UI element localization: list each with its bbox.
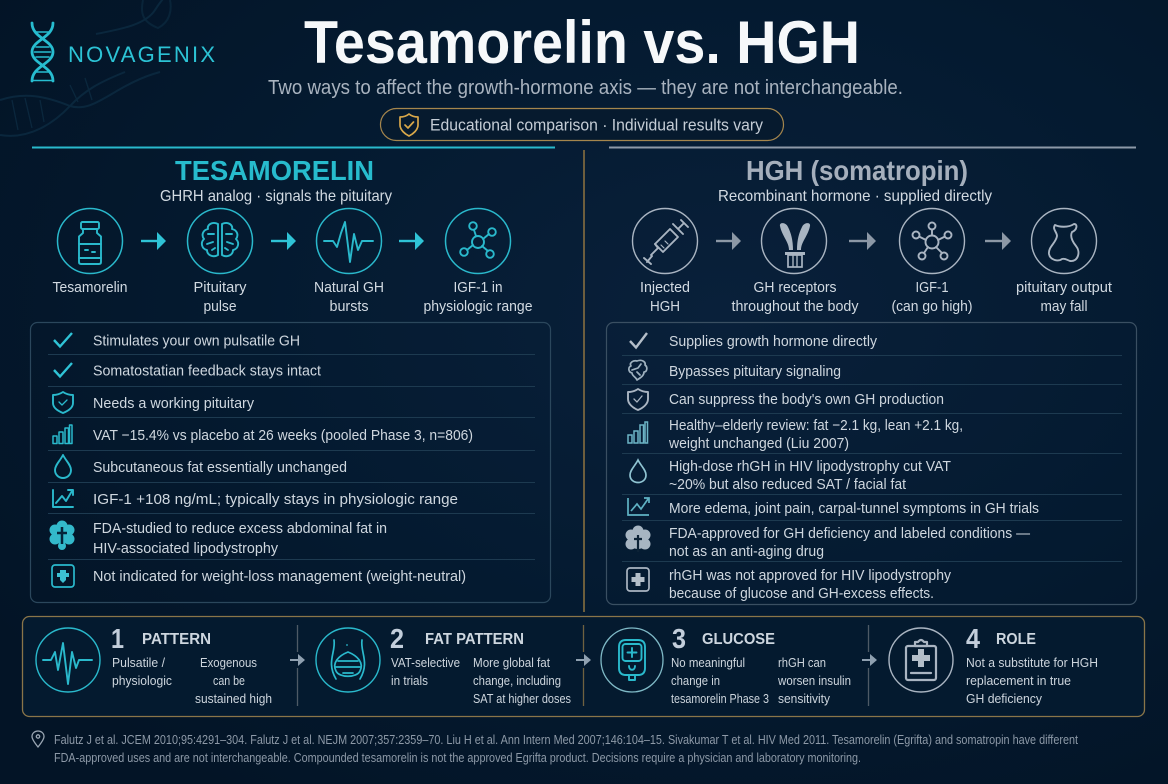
row: subcutaneous fat: Subcutaneous fat essentially unchanged <box>93 459 347 476</box>
step: IGF-1 physiologic range: IGF-1 in <box>454 279 502 296</box>
item 4: role: replacement in true <box>966 673 1071 688</box>
step: Natural GH bursts <box>314 208 384 315</box>
step: GH receptors: GH receptors <box>754 279 836 296</box>
item 4: role: ROLE <box>996 631 1036 648</box>
item 2: fat pattern: in trials <box>391 673 428 688</box>
panel: key differences <box>22 616 1144 716</box>
flow: HGH pathway <box>632 208 1113 315</box>
row: high-dose rhGH <box>630 458 951 493</box>
panel: HGH header <box>718 155 992 205</box>
arrow <box>716 232 741 250</box>
row: FDA-approved <box>626 525 1030 560</box>
disclaimer pill: Educational comparison · Individual results vary <box>430 116 764 134</box>
arrow <box>860 652 878 668</box>
item 1: pattern: sustained high <box>195 691 272 706</box>
item 3: glucose: worsen insulin <box>777 673 851 688</box>
disclaimer pill <box>380 108 784 140</box>
panel: Tesamorelin header <box>160 155 392 205</box>
row: high-dose rhGH: ~20% but also reduced SAT / facial fat <box>669 476 907 493</box>
row: feedback intact: Somatostatian feedback stays intact <box>93 362 322 380</box>
item 3: glucose: No meaningful <box>671 655 745 670</box>
step: Pituitary pulse: pulse <box>204 298 236 315</box>
step: Pituitary pulse: Pituitary <box>194 279 247 296</box>
item 4: role: Not a substitute for HGH <box>966 655 1098 670</box>
panel: HGH header: HGH (somatropin) <box>746 155 968 186</box>
logo: Novagenix: NOVAGENIX <box>68 42 215 67</box>
icon: location pin <box>32 731 44 747</box>
arrow <box>985 232 1011 250</box>
title: Tesamorelin vs. HGH <box>304 9 860 76</box>
icon: DNA helix <box>32 23 53 81</box>
footnote: FDA-approved uses and are not interchangeable. Compounded tesamorelin is not the approved Egrifta product. Decisions require a physician and laboratory monitoring. <box>54 751 861 765</box>
step: IGF-1 physiologic range: physiologic range <box>424 298 532 315</box>
column rules <box>32 146 555 148</box>
row: FDA-studied <box>50 520 387 557</box>
row: working pituitary <box>53 392 254 413</box>
item 1: pattern: can be <box>213 673 245 688</box>
step: Tesamorelin vial: Tesamorelin <box>52 279 128 296</box>
panel: Tesamorelin header: TESAMORELIN <box>175 155 374 186</box>
arrow <box>141 232 166 250</box>
row: supplies GH: Supplies growth hormone directly <box>669 333 877 350</box>
arrow <box>288 652 306 668</box>
logo: Novagenix <box>32 23 215 81</box>
row: high-dose rhGH: High-dose rhGH in HIV lipodystrophy cut VAT <box>669 458 951 475</box>
step: Tesamorelin vial <box>52 208 128 296</box>
step: GH receptors: throughout the body <box>732 298 859 315</box>
row: not approved for HIV lipodystrophy <box>627 567 951 602</box>
item 1: pattern: PATTERN <box>142 631 211 648</box>
step: Pituitary pulse <box>188 208 252 315</box>
item 4: role: GH deficiency <box>966 691 1042 706</box>
step: Injected HGH: HGH <box>650 298 680 315</box>
item 3: glucose: GLUCOSE <box>702 631 775 648</box>
row: bypasses pituitary <box>629 360 841 380</box>
panel: HGH facts <box>606 322 1136 604</box>
row: FDA-approved: FDA-approved for GH deficiency and labeled conditions — <box>669 525 1030 542</box>
step: IGF-1 physiologic range <box>424 208 532 315</box>
item 2: fat pattern: More global fat <box>473 655 550 670</box>
item 2: fat pattern: SAT at higher doses <box>473 691 571 706</box>
item 3: glucose: sensitivity <box>778 691 830 706</box>
item 1: pattern: Pulsatile / <box>112 655 165 670</box>
row: FDA-studied: FDA-studied to reduce excess abdominal fat in <box>93 520 387 537</box>
row: FDA-studied: HIV-associated lipodystrophy <box>93 540 278 557</box>
item 1: pattern <box>36 623 272 706</box>
panel: Tesamorelin header: GHRH analog · signals the pituitary <box>160 188 392 205</box>
background DNA decoration <box>0 0 171 136</box>
panel: Tesamorelin facts <box>30 322 550 602</box>
row: pulsatile GH: Stimulates your own pulsatile GH <box>93 332 300 350</box>
row: not for weight loss: Not indicated for weight-loss management (weight-neutral) <box>93 568 466 585</box>
row: suppresses GH <box>628 389 944 410</box>
row: healthy-elderly review: weight unchanged (Liu 2007) <box>668 435 849 452</box>
step: IGF-1 can go high: IGF-1 <box>916 279 948 296</box>
item 2: fat pattern: 2 <box>390 623 404 654</box>
row: bypasses pituitary: Bypasses pituitary signaling <box>669 363 841 380</box>
row: side effects: More edema, joint pain, carpal-tunnel symptoms in GH trials <box>669 500 1039 517</box>
row: not approved for HIV lipodystrophy: rhGH was not approved for HIV lipodystrophy <box>669 567 951 584</box>
item 1: pattern: 1 <box>111 623 124 654</box>
arrow <box>271 232 296 250</box>
item 3: glucose: rhGH can <box>778 655 826 670</box>
step: pituitary output may fall <box>1016 208 1113 315</box>
item 4: role: 4 <box>966 623 980 654</box>
item 4: role <box>889 623 1098 706</box>
item 1: pattern: physiologic <box>112 673 172 688</box>
arrow <box>574 652 592 668</box>
row: subcutaneous fat <box>55 455 347 478</box>
item 2: fat pattern <box>316 623 571 706</box>
item 2: fat pattern: VAT-selective <box>391 655 460 670</box>
step: Injected HGH <box>632 208 698 315</box>
step: Natural GH bursts: Natural GH <box>314 279 384 296</box>
arrow <box>399 232 424 250</box>
row: healthy-elderly review: Healthy–elderly review: fat −2.1 kg, lean +2.1 kg, <box>669 417 963 434</box>
step: pituitary output may fall: pituitary output <box>1016 279 1113 296</box>
step: Natural GH bursts: bursts <box>330 298 368 315</box>
step: IGF-1 can go high <box>892 208 972 315</box>
item 2: fat pattern: change, including <box>473 673 561 688</box>
icon: gold shield <box>400 114 418 136</box>
row: suppresses GH: Can suppress the body's own GH production <box>669 391 944 408</box>
arrow <box>849 232 876 250</box>
item 2: fat pattern: FAT PATTERN <box>425 631 524 648</box>
step: GH receptors <box>732 208 859 315</box>
item 3: glucose: change in <box>671 673 720 688</box>
row: healthy-elderly review <box>628 417 963 452</box>
row: FDA-approved: not as an anti-aging drug <box>669 543 824 560</box>
item 1: pattern: Exogenous <box>200 655 257 670</box>
item 3: glucose: 3 <box>672 623 686 654</box>
row: IGF-1 change: IGF-1 +108 ng/mL; typically stays in physiologic range <box>93 491 458 508</box>
row: working pituitary: Needs a working pituitary <box>93 395 254 412</box>
subtitle: Two ways to affect the growth-hormone axis — they are not interchangeable. <box>268 77 903 99</box>
footnote <box>32 731 1078 765</box>
row: VAT reduction: VAT −15.4% vs placebo at 26 weeks (pooled Phase 3, n=806) <box>93 427 473 444</box>
row: not for weight loss <box>52 565 466 587</box>
item 3: glucose <box>601 623 851 706</box>
step: IGF-1 can go high: (can go high) <box>892 298 972 315</box>
step: Injected HGH: Injected <box>640 279 690 296</box>
step: pituitary output may fall: may fall <box>1040 298 1088 315</box>
flow: Tesamorelin pathway <box>52 208 532 315</box>
row: not approved for HIV lipodystrophy: because of glucose and GH-excess effects. <box>669 585 934 602</box>
item 3: glucose: tesamorelin Phase 3 <box>671 691 769 706</box>
panel: HGH header: Recombinant hormone · supplied directly <box>718 188 992 205</box>
